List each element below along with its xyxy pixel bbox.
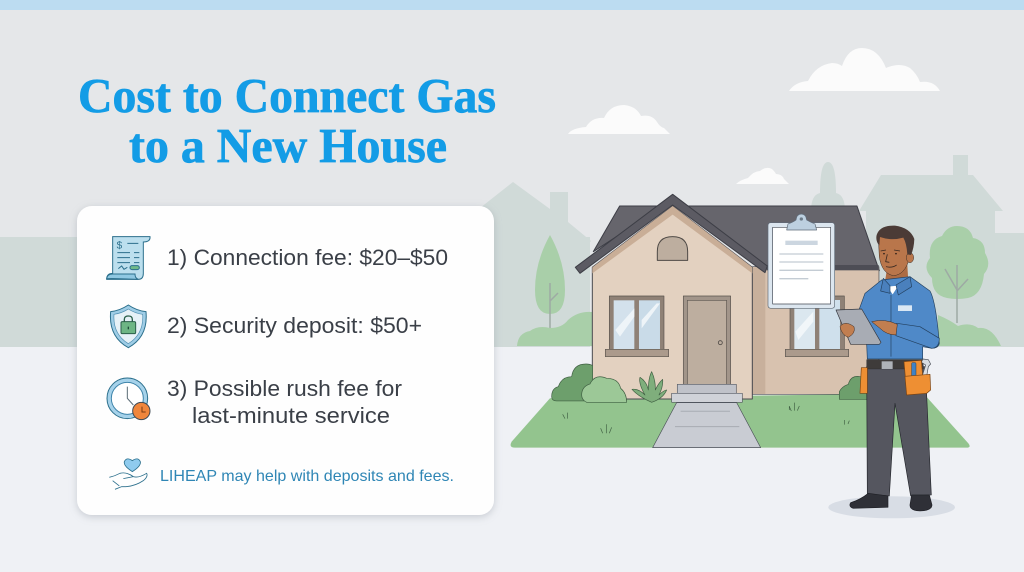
background house left <box>466 182 591 347</box>
house scene <box>511 194 970 448</box>
background strip left <box>0 237 590 347</box>
face details <box>881 250 900 267</box>
face <box>878 236 909 276</box>
title: to a New House <box>129 118 447 173</box>
item 2 text: 2) Security deposit: $50+ <box>167 313 422 338</box>
belt <box>867 360 923 369</box>
worker <box>828 226 955 518</box>
trousers <box>867 367 931 496</box>
item 1 text: 1) Connection fee: $20–$50 <box>167 245 448 270</box>
grass tufts right <box>789 403 849 425</box>
LIHEAP note: LIHEAP may help with deposits and fees. <box>160 468 454 485</box>
ear <box>906 253 914 263</box>
tablet <box>836 309 881 344</box>
title: Cost to Connect Gas <box>78 68 496 123</box>
side wall <box>752 267 879 394</box>
item 3 text: last-minute service <box>192 403 390 428</box>
side wall shade <box>753 267 765 394</box>
undershirt <box>887 286 898 294</box>
lawn <box>511 393 970 448</box>
tool pouch right <box>905 374 931 395</box>
background tree silhouette <box>811 162 845 211</box>
clipboard <box>768 214 835 308</box>
pen <box>912 363 916 376</box>
neck <box>885 265 908 290</box>
name tag <box>898 305 912 311</box>
bush right <box>839 376 870 399</box>
icon: clock <box>107 378 150 420</box>
top accent band <box>0 0 1024 10</box>
icon: hand with heart <box>109 459 147 489</box>
tool pouch left <box>860 368 867 393</box>
steps <box>672 384 742 402</box>
dormer window <box>657 237 688 260</box>
cloud: small <box>736 168 789 184</box>
front wall <box>592 206 752 399</box>
green tree right <box>926 226 988 323</box>
panel: costs card <box>77 206 494 515</box>
gable shade <box>592 206 752 273</box>
bush dark <box>552 364 593 401</box>
right side of house, worker and clipboard <box>768 214 955 518</box>
left hand <box>840 323 854 337</box>
cloud: large <box>789 48 940 91</box>
front window <box>605 296 669 357</box>
item 3 text <box>167 376 402 428</box>
side window <box>785 296 849 357</box>
icon: bill <box>107 237 150 279</box>
green bush left <box>517 312 592 346</box>
right hand <box>872 320 897 335</box>
shirt <box>859 277 939 359</box>
hair <box>876 226 914 255</box>
sky background <box>0 0 1024 348</box>
upper body <box>836 226 939 395</box>
shoes <box>850 493 932 511</box>
roof shadow band <box>767 265 879 270</box>
item 3 text: 3) Possible rush fee for <box>167 376 402 401</box>
title <box>78 68 496 173</box>
pouch back <box>904 360 923 377</box>
belt buckle <box>882 361 893 369</box>
main roof <box>593 200 879 272</box>
icon: bill: $ <box>117 241 123 252</box>
ground shadow <box>828 496 955 518</box>
background house right <box>859 155 1024 347</box>
bush light <box>582 377 627 402</box>
background houses and trees <box>0 155 1024 347</box>
ground background <box>0 347 1024 572</box>
grass tufts <box>563 406 789 433</box>
green bush right <box>938 315 1001 346</box>
gable roof <box>575 194 767 273</box>
placket <box>890 295 892 357</box>
door <box>683 296 731 386</box>
green tree left <box>535 235 565 329</box>
wrench <box>921 359 931 376</box>
forearm <box>896 323 939 348</box>
cloud: medium <box>568 105 670 134</box>
agave plant <box>632 372 667 402</box>
collar <box>881 277 912 295</box>
walkway <box>653 403 761 448</box>
icon: shield with lock <box>110 305 146 348</box>
